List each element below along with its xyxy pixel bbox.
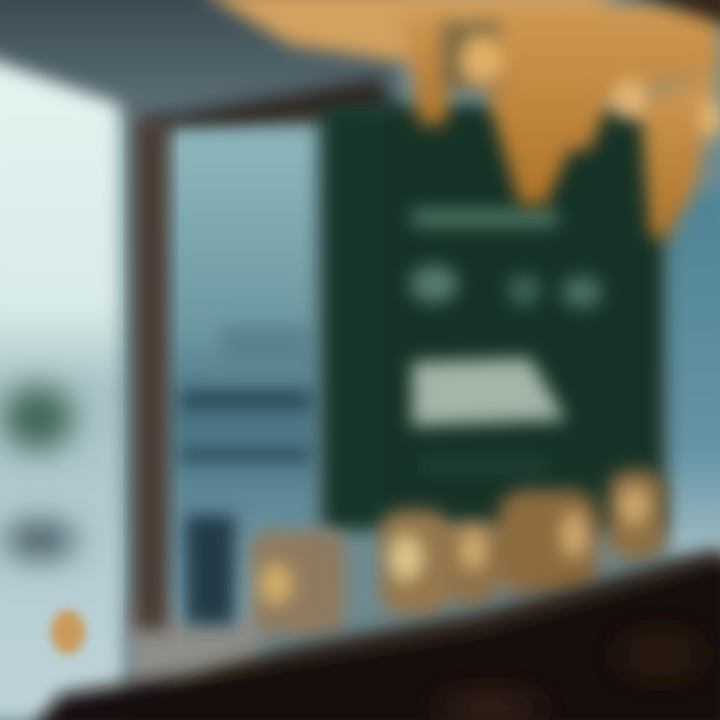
left window: amber lamp — [51, 610, 85, 654]
middle window: horizontal reflections — [180, 325, 310, 625]
counter glow — [435, 633, 705, 720]
dark ceiling corner — [610, 0, 720, 28]
panel heading — [412, 210, 557, 226]
counter front — [30, 548, 720, 720]
lower floor reflection — [130, 600, 260, 690]
green panel — [322, 105, 664, 530]
bottom golden lamps — [250, 470, 666, 635]
left window — [0, 55, 125, 720]
wooden column — [134, 120, 168, 630]
panel content — [410, 210, 602, 472]
ceiling — [0, 0, 400, 135]
panel central block — [412, 358, 566, 426]
right window — [668, 190, 720, 560]
panel footer — [420, 460, 550, 472]
middle window — [168, 130, 316, 620]
golden ceiling installation — [200, 0, 720, 240]
panel icons row — [410, 265, 602, 308]
left window: tree and reflections — [2, 386, 76, 558]
